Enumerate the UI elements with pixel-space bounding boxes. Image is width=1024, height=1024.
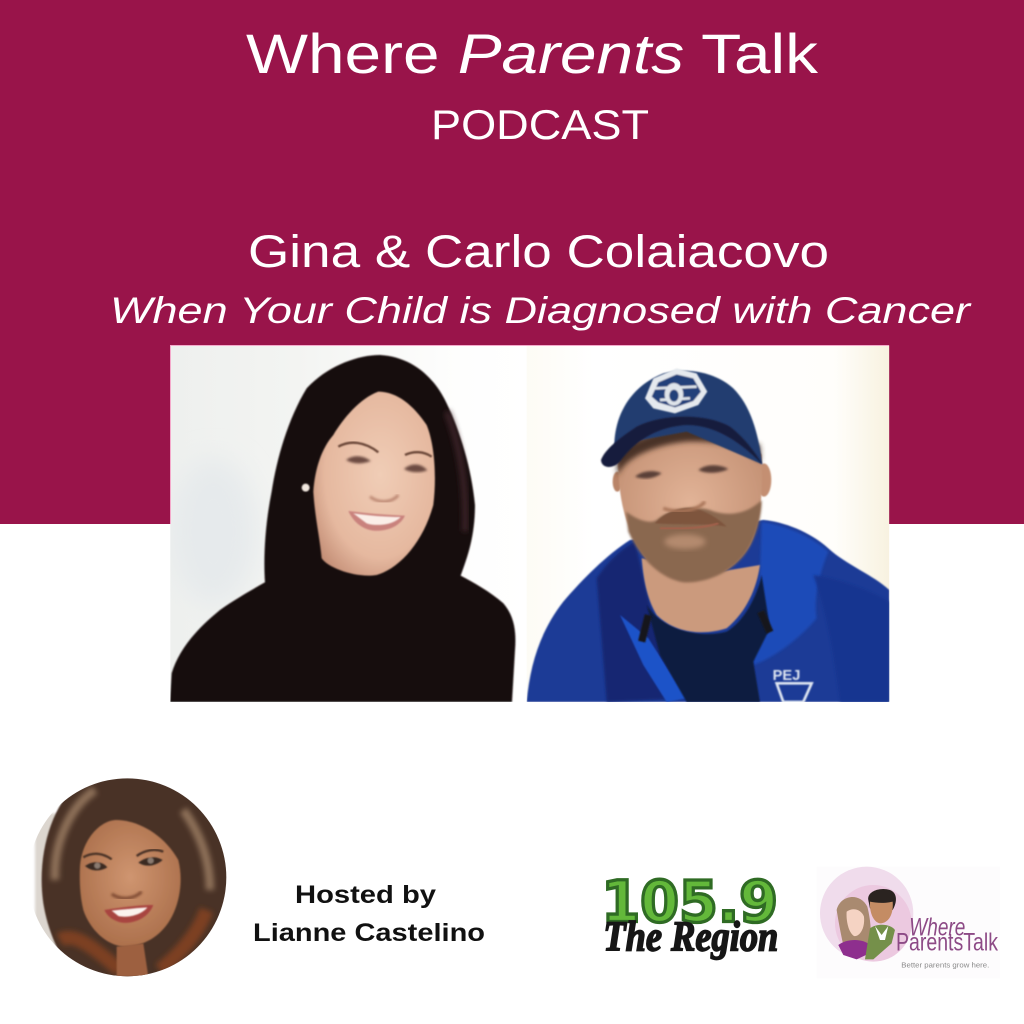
- neck: [117, 943, 148, 977]
- nose shadow: [370, 495, 398, 501]
- guest photo: [170, 345, 889, 702]
- episode title: When Your Child is Diagnosed with Cancer: [110, 290, 972, 331]
- logo: Where Parents Talk: [817, 867, 1000, 978]
- ears: [760, 462, 772, 498]
- t-shirt: [647, 575, 770, 702]
- host credit: Lianne Castelino: [253, 919, 485, 947]
- nose shadow: [663, 502, 705, 511]
- eyes: [346, 456, 427, 472]
- eyes: [635, 465, 728, 479]
- chin patch: [664, 534, 706, 549]
- logo: Where Parents Talk: Better parents grow here.: [901, 960, 989, 969]
- logo: Where Parents Talk: ParentsTalk: [896, 930, 998, 957]
- photo: Gina: [170, 345, 530, 702]
- crimson header background: [0, 0, 1024, 524]
- cap logo: [645, 368, 707, 413]
- face: [617, 438, 763, 572]
- smile: [348, 511, 405, 531]
- host eyebrows: [83, 850, 163, 859]
- host eyes: [85, 857, 163, 870]
- guest names: Gina & Carlo Colaiacovo: [248, 226, 829, 277]
- logo: 105.9 The Region: 105.9: [601, 868, 778, 935]
- neck: [642, 558, 760, 632]
- cap brim: [601, 417, 762, 467]
- host portrait: [34, 778, 226, 976]
- host credit: [253, 881, 485, 947]
- eyebrows: [338, 443, 432, 457]
- cap: [614, 371, 762, 464]
- logo wordmark: Where: [909, 914, 965, 941]
- logo woman: [837, 897, 871, 947]
- beard: [626, 500, 762, 582]
- chest emblem: [773, 668, 812, 702]
- photo: Carlo: [520, 345, 889, 702]
- title: Where Parents Talk: Where Parents Talk: [246, 22, 819, 85]
- host face: [80, 820, 181, 947]
- hoodie: [527, 520, 889, 702]
- pink photo edge: [170, 345, 889, 524]
- host nose: [112, 892, 142, 898]
- host credit: Hosted by: [295, 881, 436, 909]
- logo man: [868, 889, 896, 910]
- host smile: [104, 905, 153, 923]
- zipper shadows: [642, 612, 770, 642]
- forehead shadow and hair: [612, 430, 765, 476]
- earring: [302, 484, 310, 492]
- chest emblem: PEJ: [773, 668, 800, 684]
- subtitle: PODCAST: PODCAST: [431, 101, 649, 148]
- moustache and mouth: [655, 508, 727, 527]
- logo circles: [820, 867, 913, 960]
- logo: 105.9 The Region: The Region: [603, 914, 778, 961]
